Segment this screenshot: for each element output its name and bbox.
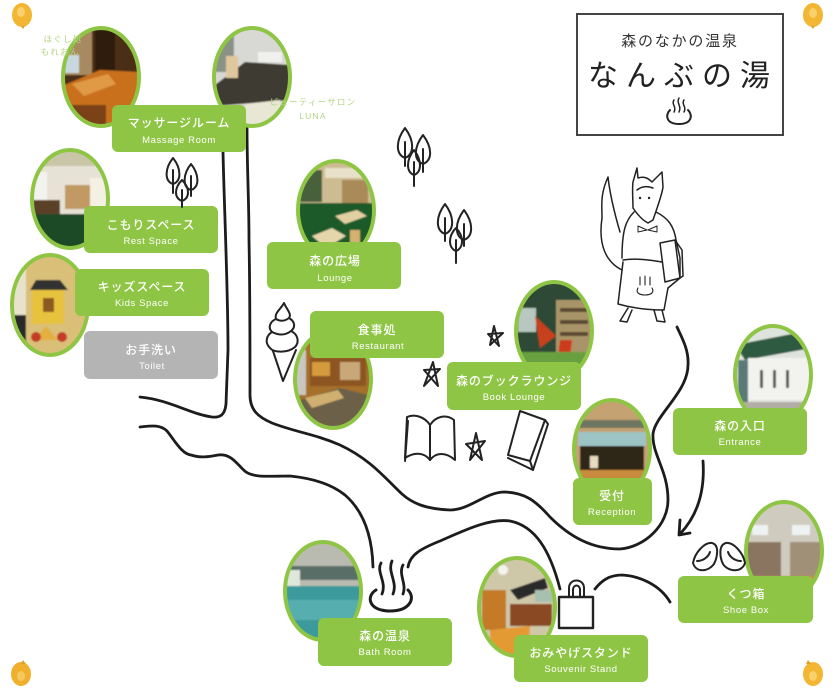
icon: trees top centre bbox=[398, 128, 430, 186]
balloon: bottom left bbox=[11, 660, 31, 686]
icon: shoes bbox=[693, 543, 745, 570]
label: reception bbox=[573, 478, 652, 525]
label: toilet: お手洗い bbox=[125, 342, 177, 357]
caption: beauty salon LUNA: ビューティーサロン bbox=[270, 97, 356, 107]
label: lounge: Lounge bbox=[317, 273, 353, 284]
icon: star 1 bbox=[488, 326, 503, 346]
caption: beauty salon LUNA bbox=[270, 97, 356, 121]
label: rest space: Rest Space bbox=[123, 236, 179, 247]
arrow: entrance to shoe box bbox=[679, 461, 703, 535]
icon: soft serve ice cream bbox=[267, 303, 298, 381]
icon: star 3 bbox=[466, 433, 485, 460]
fox apron bbox=[618, 259, 668, 310]
fox head bbox=[633, 168, 663, 223]
fox headband bbox=[637, 187, 653, 190]
fox body bbox=[622, 212, 680, 288]
fox bow tie bbox=[638, 226, 657, 232]
label: shoe box: くつ箱 bbox=[727, 586, 765, 601]
caption: beauty salon LUNA: LUNA bbox=[299, 111, 327, 121]
label: book lounge: Book Lounge bbox=[483, 392, 545, 403]
fox book bbox=[660, 240, 683, 282]
title box bbox=[577, 14, 783, 135]
label: kids space bbox=[75, 269, 209, 316]
label: souvenir stand: おみやげスタンド bbox=[529, 646, 633, 660]
label: shoe box bbox=[678, 576, 813, 623]
photo: bath room bbox=[282, 539, 366, 643]
fox feet bbox=[620, 308, 665, 322]
label: souvenir stand bbox=[514, 635, 648, 682]
fox eyes bbox=[640, 197, 649, 199]
label: rest space bbox=[84, 206, 218, 253]
road: right path and loop to the entrance bbox=[247, 125, 688, 549]
label: massage room: Massage Room bbox=[142, 135, 216, 146]
label: reception: Reception bbox=[588, 507, 636, 518]
label: bath room: 森の温泉 bbox=[359, 628, 411, 643]
photo: book lounge bbox=[514, 280, 594, 368]
icon: hot spring symbol bbox=[667, 98, 691, 124]
icon: shopping bag bbox=[559, 580, 593, 628]
label: massage room: マッサージルーム bbox=[128, 116, 230, 130]
label: restaurant bbox=[310, 311, 444, 358]
photo: beauty salon bbox=[210, 25, 294, 130]
photo: rest space bbox=[28, 147, 112, 252]
title: name: なんぶの湯 bbox=[588, 60, 778, 93]
label: massage room bbox=[112, 105, 246, 152]
photo: kids space bbox=[8, 253, 92, 357]
label: kids space: キッズスペース bbox=[98, 279, 186, 294]
label: toilet bbox=[84, 331, 218, 379]
label: restaurant: Restaurant bbox=[352, 341, 404, 352]
road: path from bath to souvenir stand bbox=[408, 521, 560, 589]
photo: reception bbox=[572, 398, 652, 478]
label: toilet: Toilet bbox=[139, 361, 165, 372]
label: restaurant: 食事処 bbox=[358, 322, 396, 337]
label: entrance bbox=[673, 408, 807, 455]
road: left path bbox=[140, 152, 228, 417]
road: lower path to bath bbox=[140, 426, 373, 567]
balloon: bottom right bbox=[803, 660, 823, 686]
balloon: top right bbox=[803, 3, 823, 29]
balloon: top left bbox=[12, 3, 32, 29]
road: path from souvenir stand to shoe box bbox=[595, 575, 670, 602]
photo: shoe box bbox=[744, 500, 824, 586]
title: subtitle: 森のなかの温泉 bbox=[621, 33, 739, 50]
caption: relaxation salon: ほぐし処 bbox=[44, 34, 82, 44]
photo: entrance bbox=[733, 324, 813, 408]
caption: relaxation salon bbox=[41, 34, 82, 57]
photo: massage room bbox=[60, 25, 144, 130]
fox tail bbox=[601, 177, 622, 270]
label: souvenir stand: Souvenir Stand bbox=[544, 664, 618, 675]
icon: closed book bbox=[508, 411, 548, 470]
icon: trees right of centre bbox=[438, 204, 471, 263]
label: lounge bbox=[267, 242, 401, 289]
label: book lounge: 森のブックラウンジ bbox=[456, 373, 572, 388]
label: bath room bbox=[318, 618, 452, 666]
caption: relaxation salon: もれおん bbox=[41, 47, 79, 57]
label: rest space: こもりスペース bbox=[107, 218, 195, 232]
label: kids space: Kids Space bbox=[115, 298, 169, 309]
label: shoe box: Shoe Box bbox=[723, 605, 769, 616]
label: bath room: Bath Room bbox=[359, 647, 411, 658]
label: lounge: 森の広場 bbox=[309, 253, 361, 268]
icon: star 2 bbox=[424, 362, 440, 386]
illustration: fox mascot with apron bbox=[601, 168, 683, 322]
photo: lounge bbox=[296, 159, 376, 242]
icon: trees near massage room bbox=[167, 158, 197, 207]
label: entrance: 森の入口 bbox=[714, 418, 766, 433]
label: reception: 受付 bbox=[599, 488, 625, 503]
icon: bath hot spring symbol bbox=[370, 561, 411, 611]
label: entrance: Entrance bbox=[719, 437, 761, 448]
fox apron symbol bbox=[637, 276, 653, 295]
icon: open book bbox=[405, 416, 455, 461]
photo: restaurant bbox=[293, 337, 373, 430]
label: book lounge bbox=[447, 362, 581, 410]
photo: souvenir stand bbox=[476, 555, 560, 660]
